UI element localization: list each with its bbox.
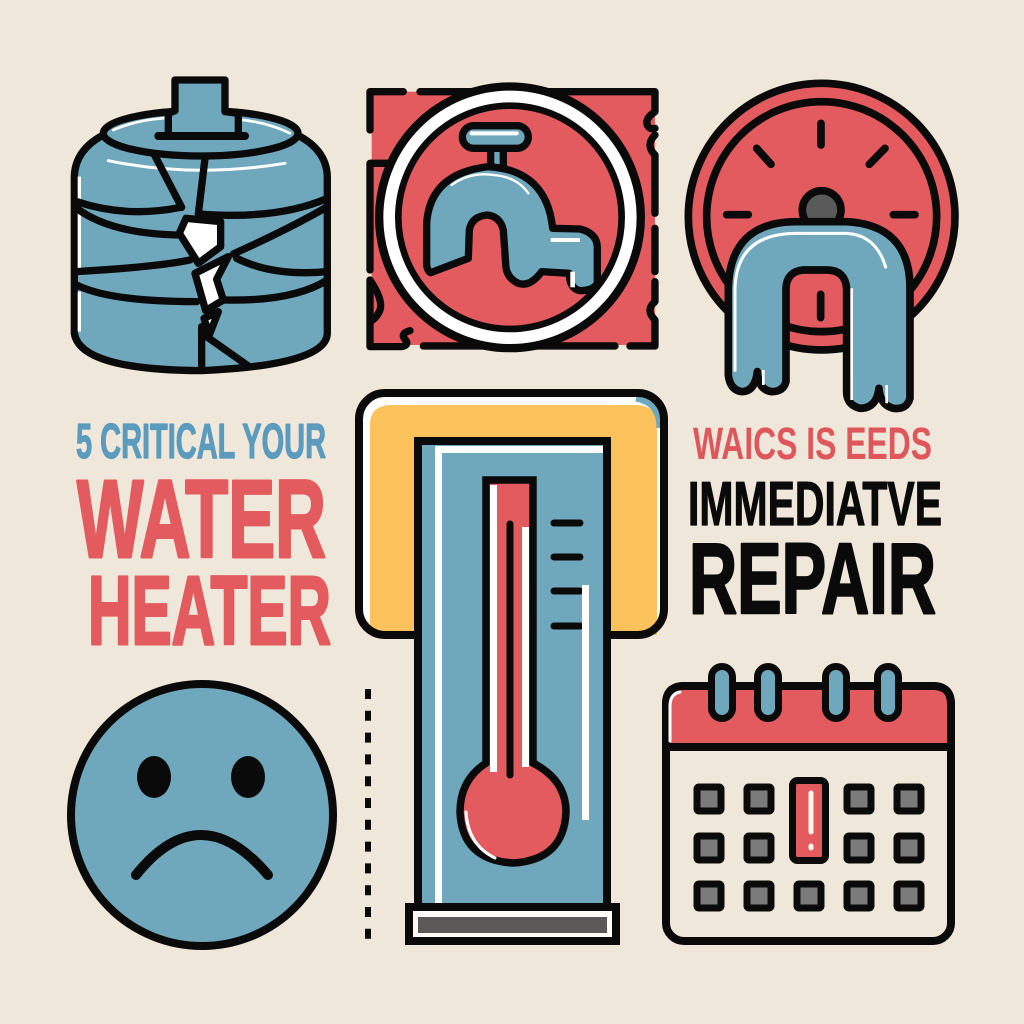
text block: right heading bbox=[688, 418, 942, 635]
text: heater: HEATER bbox=[88, 556, 331, 665]
calendar day squares bbox=[697, 787, 921, 908]
icon: sad face bbox=[71, 684, 333, 946]
icon: pressure gauge with pipe bbox=[688, 83, 955, 409]
alert day with exclamation mark bbox=[792, 780, 826, 860]
text block: left heading bbox=[76, 415, 331, 665]
text: water: WATER bbox=[77, 458, 326, 581]
icon: calendar bbox=[666, 666, 951, 941]
icon: cracked water tank bbox=[74, 80, 327, 371]
icon: faucet in red stamp bbox=[370, 87, 655, 348]
calendar rings bbox=[712, 666, 898, 718]
text: waics is eeds: WAICS IS EEDS bbox=[693, 418, 932, 469]
dotted divider line bbox=[365, 689, 371, 940]
icon: thermometer on yellow panel bbox=[359, 393, 664, 941]
text: 5 critical your: 5 CRITICAL YOUR bbox=[76, 415, 326, 469]
